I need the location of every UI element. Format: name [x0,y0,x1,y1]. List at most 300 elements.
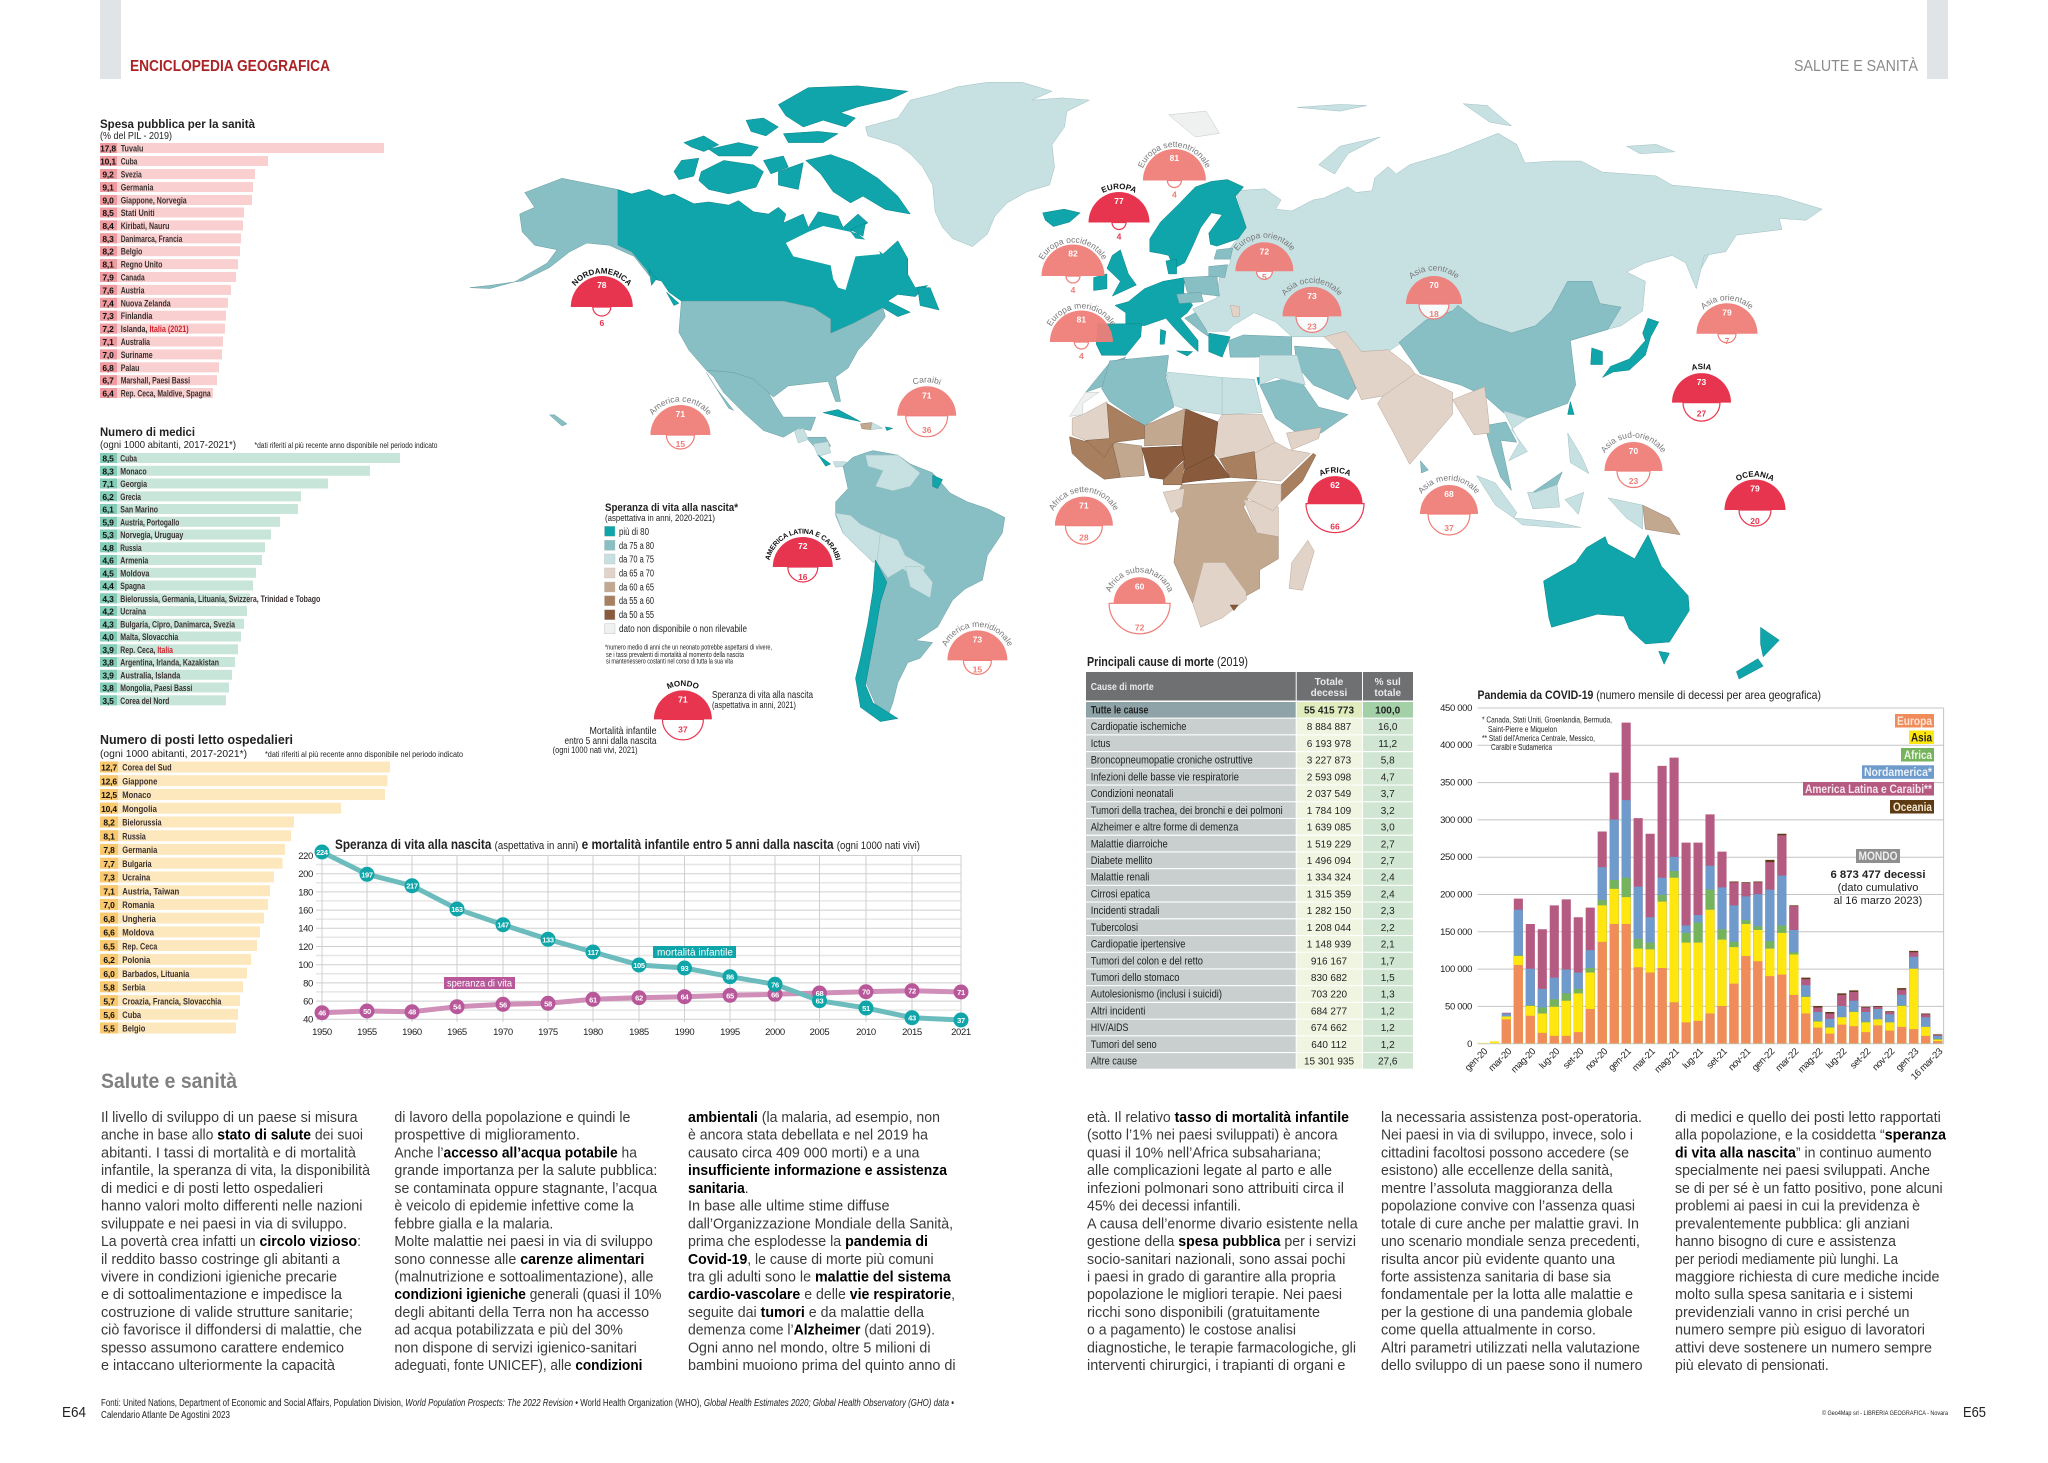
table: main causes of death: decessi [1311,688,1348,699]
bar chart: hospital beds: *dati riferiti al più recente anno disponibile nel periodo indicato [265,750,463,759]
bar chart: public health spending: (% del PIL - 2019) [100,130,172,142]
text column 4: socio-sanitari nazionali, sono assai pochi [1087,1251,1345,1268]
bar chart: number of doctors: Russia [120,543,142,554]
bar chart: public health spending: Svezia [121,170,142,180]
table: main causes of death: 1 519 229 [1307,839,1352,850]
table: main causes of death: 1,5 [1381,973,1395,984]
line chart: life expectancy and child mortality: 200 [298,869,313,880]
marker: America Latina e Caraibi: 16 [798,572,808,582]
text column 4: interventi chirurgici, i trapianti di organi e [1087,1357,1345,1374]
bar chart: hospital beds: 6,2 [103,955,115,965]
map legend: Speranza di vita alla nascita* [605,502,739,514]
marker: Europa settentrionale: 81 [1170,153,1179,163]
footer and sources: E64 [62,1404,86,1421]
text column 2: Molte malattie nei paesi in via di sviluppo [394,1233,653,1250]
line chart: life expectancy and child mortality: Speranza di vita alla nascita (aspettativa in anni) e mortalità infantile entro 5 anni dalla nascita (ogni 1000 nati vivi) [335,837,920,852]
table: main causes of death: Broncopneumopatie croniche ostruttive [1091,755,1253,767]
stacked bar chart: COVID-19 deaths: mag-21 [1653,1046,1682,1075]
line chart: life expectancy and child mortality: 180 [298,888,313,898]
marker: Europa orientale: 72 [1260,246,1269,256]
text column 6: previdenziali vanno in crisi perché un [1675,1304,1910,1321]
footer and sources: © Geo4Map srl - LIBRERIA GEOGRAFICA - Novara [1822,1409,1948,1417]
bar chart: number of doctors: 7,1 [102,479,114,489]
bar chart: number of doctors: Numero di medici [100,425,195,439]
text column 4: i paesi in grado di garantire alla propria [1087,1268,1336,1286]
marker: Mondo: 71 [678,694,688,704]
bar chart: public health spending: Giappone, Norvegia [121,196,187,206]
table: main causes of death: % sul [1375,677,1401,688]
text column 4: popolazione le migliori terapie. Nei paesi [1087,1286,1342,1303]
text column 1: infantile, la speranza di vita, la disponibilità [101,1162,371,1179]
bar chart: number of doctors: Argentina, Irlanda, Kazakistan [120,658,219,668]
table: main causes of death: 3,2 [1381,806,1395,817]
text column 2: è veicolo di epidemie infettive come la [394,1198,634,1215]
text column 4: A causa dell’enorme divario esistente nella [1087,1215,1358,1232]
text column 3: cardio-vascolare e delle vie respiratorie, [688,1286,955,1303]
marker: Europa settentrionale [1138,142,1210,200]
bar chart: hospital beds: Giappone [122,776,157,787]
bar chart: hospital beds: 7,3 [103,873,115,883]
bar chart: public health spending: 7,6 [102,285,114,295]
bar chart: hospital beds: Monaco [122,790,151,801]
bar chart: hospital beds: 12,5 [101,790,117,800]
stacked bar chart: COVID-19 deaths: 200 000 [1440,890,1472,900]
text column 3: prima che esplodesse la pandemia di [688,1233,928,1250]
marker: Europa settentrionale: 4 [1172,190,1177,200]
marker: America meridionale: 15 [973,664,982,674]
bar chart: public health spending: 9,1 [102,182,114,192]
text column 1: costruzione di valide strutture sanitarie; [101,1304,353,1321]
bar chart: number of doctors: Norvegia, Uruguay [120,530,184,541]
table: main causes of death: Diabete mellito [1091,855,1152,867]
marker: Europa: EUROPA [1101,184,1136,193]
Greenland [865,82,1089,247]
footer and sources: Fonti: United Nations, Department of Economic and Social Affairs, Population Division, World Population Prospects: The 2022 Revision • World Health Organization (WHO), Global Health Estimates 2020; Global Health Observatory (GHO) data • [101,1398,954,1409]
marker: Europa orientale: Europa orientale [1234,232,1294,250]
world average labels: entro 5 anni dalla nascita [564,735,657,747]
text column 1: di medici e di posti letto ospedalieri [101,1180,323,1197]
bar chart: number of doctors: 3,9 [102,645,114,655]
table: main causes of death: Principali cause di morte (2019) [1087,654,1248,669]
marker: Oceania: 79 [1750,484,1760,494]
bar chart: number of doctors: Bulgaria, Cipro, Danimarca, Svezia [120,619,236,630]
marker: Asia: 73 [1697,377,1706,387]
marker: Asia [1672,364,1731,422]
bar chart: public health spending: 6,4 [102,388,114,398]
text column 1: spesso assumono carattere endemico [101,1339,344,1356]
line chart: life expectancy and child mortality: 43 [908,1014,916,1023]
marker: Asia centrale: 70 [1429,280,1439,290]
text column 5: uno scenario mondiale senza precedenti, [1381,1233,1640,1250]
bar chart: number of doctors: 4,6 [102,556,114,566]
marker: Asia meridionale: Asia meridionale [1419,474,1479,494]
text column 2: non dispone di servizi igienico-sanitari [394,1339,637,1356]
table: main causes of death: 2,3 [1381,906,1395,917]
stacked bar chart: COVID-19 deaths: 100 000 [1440,964,1472,975]
text column 5: Altri parametri utilizzati nella valutazione [1381,1339,1640,1356]
table: main causes of death: 2,4 [1381,873,1395,884]
stacked bar chart: COVID-19 deaths: 400 000 [1440,740,1472,751]
bar chart: public health spending: Germania [121,182,154,194]
stacked bar chart: COVID-19 deaths: 16 mar-23 [1909,1046,1945,1083]
table: main causes of death: 1 282 150 [1307,906,1352,917]
marker: Asia centrale: 18 [1429,309,1439,319]
map legend: se i tassi prevalenti di mortalità al momento della nascita [606,652,744,659]
table: main causes of death: 55 415 773 [1304,706,1354,716]
bar chart: hospital beds: 12,7 [101,763,117,773]
marker: Asia: 27 [1697,409,1706,419]
text column 3: Ogni anno nel mondo, oltre 5 milioni di [688,1339,930,1356]
stacked bar chart: COVID-19 deaths: mar-21 [1630,1046,1658,1074]
stacked bar chart: COVID-19 deaths: Africa [1904,750,1933,762]
bar chart: public health spending: 8,1 [102,260,114,270]
marker: Mondo: MONDO [666,680,699,689]
text column 6: di vita alla nascita” in continuo aumento [1675,1144,1932,1161]
text column 1: La povertà crea infatti un circolo vizioso: [101,1233,361,1250]
bar chart: hospital beds: 6,6 [103,928,115,938]
marker: Europa meridionale: Europa meridionale [1046,304,1115,326]
stacked bar chart: COVID-19 deaths: mag-22 [1796,1046,1825,1075]
Alaska and United States [470,178,885,448]
bar chart: number of doctors: 3,5 [102,696,114,706]
text column 3: tra gli adulti sono le malattie del sistema [688,1268,951,1286]
table: main causes of death: 3 227 873 [1307,756,1352,767]
marker: Mondo [654,680,712,740]
marker: Asia: ASIA [1692,364,1711,370]
map: Europe, Africa, Asia, Oceania [1043,104,1822,679]
line chart: life expectancy and child mortality: 1965 [447,1027,467,1038]
bar chart: number of doctors: 6,2 [102,492,114,502]
text column 6: maggiore richiesta di cure mediche incide [1675,1268,1940,1286]
bar chart: public health spending: Finlandia [121,311,153,322]
text column 4: gestione della spesa pubblica per i servizi [1087,1233,1356,1250]
text column 6: più elevato di pensionati. [1675,1357,1829,1374]
line chart: life expectancy and child mortality: 65 [726,991,734,1000]
bar chart: hospital beds: Serbia [122,982,146,994]
line chart: life expectancy and child mortality: 1970 [493,1027,513,1038]
table: main causes of death: 1 639 085 [1307,822,1352,834]
world average labels: (ogni 1000 nati vivi, 2021) [553,745,638,755]
bar chart: public health spending: 9,2 [102,170,114,180]
marker: Caraibi [897,376,956,438]
stacked bar chart: COVID-19 deaths: 250 000 [1440,852,1472,863]
text column 1: il reddito basso costringe gli abitanti a [101,1251,341,1268]
bar chart: public health spending: 8,5 [102,208,114,218]
text column 4: infezioni polmonari sono attribuiti circa il [1087,1180,1344,1197]
bar chart: number of doctors: 4,3 [102,594,114,604]
table: main causes of death: 2 593 098 [1307,772,1352,783]
bar chart: hospital beds: Mongolia [122,804,157,815]
table: main causes of death: 1 334 324 [1307,873,1352,884]
text column 2: di lavoro della popolazione e quindi le [394,1109,630,1126]
line chart: life expectancy and child mortality: 54 [453,1003,462,1012]
table: main causes of death: Infezioni delle basse vie respiratorie [1091,771,1239,783]
text column 3: In base alle ultime stime diffuse [688,1198,890,1215]
line chart: life expectancy and child mortality: 117 [587,948,599,957]
bar chart: hospital beds: Polonia [122,955,151,966]
map legend: da 55 a 60 [619,596,654,607]
table: main causes of death: 1,2 [1381,1040,1395,1051]
line chart: life expectancy and child mortality: 51 [862,1004,870,1013]
table: main causes of death: 1,7 [1381,956,1395,967]
bar chart: number of doctors: 8,5 [102,454,114,464]
line chart: life expectancy and child mortality: 224 [316,848,329,857]
table: main causes of death: Totale [1315,677,1344,688]
map legend [604,502,772,666]
line chart: life expectancy and child mortality: 50 [363,1007,371,1016]
bar chart: hospital beds: 7,7 [103,859,115,869]
bar chart: public health spending: Stati Uniti [121,208,155,219]
text column 6: per periodi mediamente più lunghi. La [1675,1251,1899,1268]
table: main causes of death: 916 167 [1311,956,1348,967]
marker: Europa [1088,184,1150,242]
stacked bar chart: COVID-19 deaths: (dato cumulativo [1838,882,1918,894]
marker: Asia centrale [1406,266,1462,320]
table: main causes of death: Tumori della trachea, dei bronchi e dei polmoni [1091,805,1283,817]
bar chart: number of doctors: 8,3 [102,466,114,476]
stacked bar chart: COVID-19 deaths: Caraibi e Sudamerica [1491,742,1552,752]
table: main causes of death: 5,8 [1381,756,1395,767]
marker: America centrale: 15 [676,439,685,449]
Arctic islands [1169,111,1219,137]
marker: Africa subsahariana: 72 [1135,622,1145,632]
stacked bar chart: COVID-19 deaths: Saint-Pierre e Miquelon [1488,724,1557,734]
table: main causes of death: HIV/AIDS [1091,1022,1128,1034]
table: main causes of death: Altri incidenti [1091,1006,1145,1018]
line chart: life expectancy and child mortality: 2010 [856,1027,876,1038]
marker: Africa subsahariana: 60 [1135,581,1145,591]
bar chart: hospital beds: Moldova [122,928,155,939]
bar chart: public health spending: 7,0 [102,350,114,360]
text column 4: 45% dei decessi infantili. [1087,1198,1241,1215]
marker: Africa subsahariana [1106,566,1172,634]
stacked bar chart: COVID-19 deaths: lug-21 [1681,1046,1706,1071]
bar chart: number of doctors: 5,3 [102,530,114,540]
table: main causes of death: 6 193 978 [1307,739,1352,750]
footer and sources: E65 [1963,1404,1986,1421]
text column 5: esistono) alle eccellenze della sanità, [1381,1162,1613,1179]
bar chart: public health spending: Australia [121,337,151,348]
line chart: life expectancy and child mortality: 70 [862,988,870,997]
marker: Africa settentrionale [1050,486,1118,545]
page header: SALUTE E SANITÀ [1794,56,1918,75]
bar chart: number of doctors: Ucraina [120,606,147,618]
text column 3: causato circa 409 000 morti) e a una [688,1144,920,1161]
semicircle markers by region [570,142,1786,740]
bar chart: number of doctors: San Marino [120,504,158,516]
stacked bar chart: COVID-19 deaths: 450 000 [1440,703,1472,714]
bar chart: public health spending: 8,3 [102,234,114,244]
text column 2: sono connesse alle carenze alimentari [394,1251,644,1268]
bar chart: hospital beds: Corea del Sud [122,763,172,774]
line chart: life expectancy and child mortality: 58 [544,999,552,1008]
bar chart: hospital beds: Ungheria [122,914,156,925]
marker: America Latina e Caraibi: AMERICA LATINA E CARAIBI [765,528,841,560]
marker: Asia sud-orientale: 70 [1629,446,1638,456]
stacked bar chart: COVID-19 deaths: gen-22 [1750,1046,1777,1074]
marker: Africa: 66 [1330,522,1340,532]
text column 2: Anche l’accesso all’acqua potabile ha [394,1144,637,1161]
line chart: life expectancy and child mortality: 61 [589,995,597,1004]
table: main causes of death: 1,2 [1381,1023,1395,1034]
table: main causes of death: Condizioni neonatali [1091,788,1173,800]
bar chart: number of doctors: Bielorussia, Germania, Lituania, Svizzera, Trinidad e Tobago [120,594,320,605]
table: main causes of death: 1 496 094 [1307,856,1352,867]
stacked bar chart: COVID-19 deaths: nov-20 [1583,1046,1610,1073]
bar chart: public health spending: Marshall, Paesi Bassi [121,376,190,387]
table: main causes of death: 1 784 109 [1307,806,1352,817]
bar chart: hospital beds: 8,2 [103,818,115,828]
bar chart: public health spending: 6,7 [102,376,114,386]
map legend: da 60 a 65 [619,582,654,594]
marker: Asia orientale: 79 [1722,307,1732,317]
marker: Nordamerica: NORDAMERICA [572,268,631,286]
table: main causes of death: 2,2 [1381,923,1395,934]
line chart: life expectancy and child mortality: 62 [635,994,643,1003]
text column 6: hanno bisogno di cure e assistenza [1675,1233,1897,1250]
marker: Caraibi: 36 [922,425,932,435]
line chart: life expectancy and child mortality: 37 [957,1016,965,1025]
stacked bar chart: COVID-19 deaths: Pandemia da COVID-19 (numero mensile di decessi per area geografica) [1478,688,1821,702]
bar chart: public health spending: Kiribati, Nauru [121,221,170,232]
bar chart: hospital beds: 10,4 [101,804,117,814]
table: main causes of death: Tumori del seno [1091,1039,1157,1051]
marker: Europa occidentale: Europa occidentale [1038,237,1106,260]
map legend: dato non disponibile o non rilevabile [619,624,747,635]
text column 3: demenza come l’Alzheimer (dati 2019). [688,1322,935,1339]
line chart: life expectancy and child mortality: 1985 [629,1027,649,1038]
stacked bar chart: COVID-19 deaths: 150 000 [1440,927,1472,938]
bar chart: number of doctors: 4,2 [102,606,114,616]
marker: Europa meridionale: 4 [1079,351,1084,361]
line chart: life expectancy and child mortality: 220 [298,851,313,862]
bar chart: public health spending: 7,1 [102,337,114,347]
text column 1: anche in base allo stato di salute dei suoi [101,1127,363,1144]
table: main causes of death: Tumori dello stomaco [1091,972,1179,984]
line chart: life expectancy and child mortality: 63 [816,997,823,1006]
bar chart: number of doctors: 3,8 [102,683,114,693]
text column 5: cittadini facoltosi possono accedere (se [1381,1144,1629,1161]
stacked bar chart: COVID-19 deaths: gen-20 [1463,1046,1490,1074]
text column 1: Il livello di sviluppo di un paese si misura [101,1109,358,1126]
marker: Caraibi: 71 [922,390,932,400]
marker: Africa [1305,467,1365,534]
marker: America meridionale [942,622,1012,675]
bar chart: hospital beds: Belgio [122,1024,145,1035]
stacked bar chart: COVID-19 deaths: America Latina e Caraibi** [1805,784,1932,796]
table: main causes of death: Cardiopatie ipertensive [1091,939,1185,951]
stacked bar chart: COVID-19 deaths: set-22 [1848,1046,1873,1071]
marker: Nordamerica: 78 [597,280,607,290]
stacked bar chart: COVID-19 deaths: mag-20 [1509,1046,1538,1075]
line chart: life expectancy and child mortality: 66 [771,990,779,999]
text column 2: grande importanza per la salute pubblica: [394,1162,657,1179]
table: main causes of death: 2,1 [1381,940,1395,951]
marker: Asia meridionale: 68 [1444,489,1454,499]
bar chart: number of doctors: Grecia [120,492,142,503]
map legend: più di 80 [619,527,649,538]
line chart: life expectancy and child mortality: 1975 [538,1027,558,1038]
marker: Europa occidentale: 82 [1068,248,1078,258]
stacked bar chart: COVID-19 deaths: nov-22 [1870,1046,1897,1073]
text column 6: attivi deve sostenere un numero sempre [1675,1339,1932,1356]
stacked bar chart: COVID-19 deaths: gen-23 [1894,1046,1921,1074]
bar chart: public health spending: Cuba [121,156,138,168]
text column 5: totale di cure anche per malattie gravi. In [1381,1215,1639,1232]
bar chart: public health spending: 8,2 [102,247,114,257]
line chart: life expectancy and child mortality: 80 [303,978,313,990]
bar chart: public health spending: 7,9 [102,272,114,282]
line chart: life expectancy and child mortality: 76 [771,980,779,989]
line chart: life expectancy and child mortality: 68 [816,989,823,998]
marker: America centrale [650,397,710,450]
page header [100,0,1948,79]
stacked bar chart: COVID-19 deaths: set-20 [1561,1046,1586,1071]
table: main causes of death: 1,3 [1381,990,1395,1001]
text column 5: la necessaria assistenza post-operatoria. [1381,1109,1642,1126]
marker: America meridionale: America meridionale [942,622,1012,647]
bar chart: hospital beds: 6,5 [103,941,115,951]
marker: Caraibi: Caraibi [913,376,942,385]
line chart: life expectancy and child mortality: 197 [361,870,373,879]
table: main causes of death: Autolesionismo (inclusi i suicidi) [1091,989,1222,1001]
bar chart: hospital beds: 5,7 [103,996,115,1006]
text column 6: di medici e quello dei posti letto rapportati [1675,1109,1941,1126]
text column 6: problemi ai paesi in cui la previdenza è [1675,1198,1920,1215]
bar chart: hospital beds: Numero di posti letto ospedalieri [100,732,293,747]
text column 4: ricchi sono disponibili (gratuitamente [1087,1304,1320,1321]
table: main causes of death: 640 112 [1311,1040,1347,1051]
bar chart: number of doctors: 6,1 [102,504,114,514]
bar chart: number of doctors: 3,8 [102,658,114,668]
marker: Europa: 4 [1117,232,1122,242]
table: main causes of death: 2,4 [1381,889,1395,900]
marker: Asia orientale [1696,294,1758,346]
table: main causes of death: Ictus [1091,738,1111,750]
bar chart: number of doctors: 4,4 [102,581,114,591]
text column 3: Covid-19, le cause di morte più comuni [688,1251,934,1268]
table: main causes of death: 2,7 [1381,856,1395,867]
marker: Asia occidentale [1282,276,1342,333]
table: main causes of death: 1 208 044 [1307,923,1352,934]
table: main causes of death: Malattie renali [1091,872,1149,884]
line chart: life expectancy and child mortality: 120 [298,942,313,953]
text column 6: specialmente nei paesi sviluppati. Anche [1675,1162,1930,1179]
marker: Europa: 77 [1114,196,1124,206]
map legend: da 75 a 80 [619,541,654,552]
Beige countries [1072,305,1490,590]
marker: Africa: 62 [1330,480,1340,490]
world average labels: Mortalità infantile [590,725,657,737]
stacked bar chart: COVID-19 deaths: 350 000 [1440,778,1472,788]
map: Americas [470,82,1089,722]
line chart: life expectancy and child mortality: 2021 [951,1027,971,1038]
table: main causes of death: Incidenti stradali [1091,905,1159,917]
stacked bar chart: COVID-19 deaths: gen-21 [1606,1046,1634,1074]
line chart: life expectancy and child mortality: 64 [681,993,689,1002]
text column 1: hanno valori molto differenti nelle nazioni [101,1198,362,1215]
table: main causes of death: Altre cause [1091,1056,1137,1068]
line chart: life expectancy and child mortality: 60 [303,996,313,1008]
text column 5: popolazione convive con l’assenza quasi [1381,1198,1635,1215]
text column 6: numero sempre più esiguo di lavoratori [1675,1322,1925,1339]
table: main causes of death: Tutte le cause [1091,704,1148,716]
bar chart: hospital beds: Germania [122,845,158,856]
stacked bar chart: COVID-19 deaths: Asia [1911,732,1933,744]
marker: Nordamerica: 6 [599,318,604,328]
text column 1: sviluppate e nei paesi in via di sviluppo. [101,1215,347,1232]
text column 5: come quella attualmente in corso. [1381,1322,1596,1339]
